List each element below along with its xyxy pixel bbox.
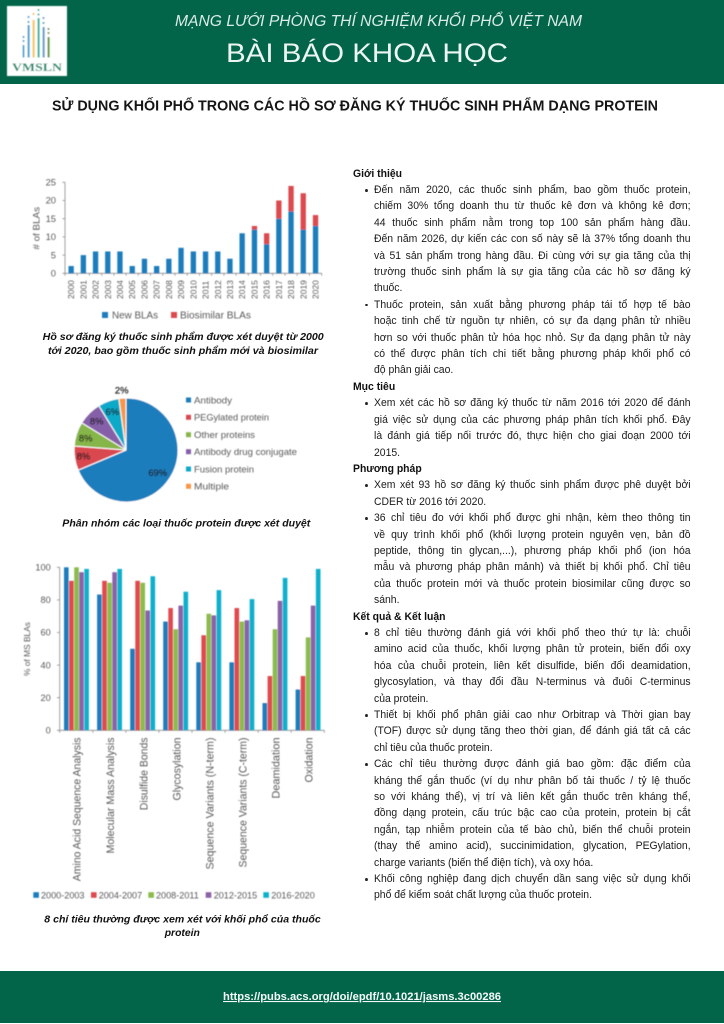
slice: PEGylated protein <box>74 446 126 470</box>
section: Kết quả & Kết luận: (thay thế amino acid), succinimidation, glycation, PEGylation, <box>374 840 691 852</box>
section: Giới thiệu: 44 thuốc sinh phẩm nằm trong top 100 sản phẩm hàng đầu. <box>374 217 691 229</box>
pie chart: protein drug types <box>74 385 297 502</box>
slice: Antibody <box>78 398 178 502</box>
section: Giới thiệu: thuốc. <box>374 282 402 294</box>
caption: chart 1: Hồ sơ đăng ký thuốc sinh phẩm được xét duyệt từ 2000 <box>43 331 324 343</box>
section: Kết quả & Kết luận: Khối công nghiệp đang dịch chuyển dần sang việc sử dụng khối <box>374 873 691 885</box>
section: Kết quả & Kết luận: glycosylation, và thay đổi đầu N-terminus và đuôi C-terminus <box>374 676 691 688</box>
section: Kết quả & Kết luận: đồng dạng protein, cấu trúc bậc cao của protein, protein bị cắt <box>374 807 691 819</box>
y axis title: % of MS BLAs <box>22 622 32 676</box>
y axis title: # of BLAs <box>32 207 42 250</box>
section: Giới thiệu: trường thuốc sinh phẩm là sự gia tăng của các hồ sơ đăng ký <box>374 266 691 278</box>
x axis category labels: Oxidation <box>304 738 316 782</box>
header title: BÀI BÁO KHOA HỌC <box>226 38 508 68</box>
caption: chart 3 <box>44 914 321 939</box>
pie legend: Other proteins <box>194 429 255 440</box>
section: Kết quả & Kết luận: ngắn, tạp nhiễm protein của tế bào chủ, biến thể chuỗi protein <box>374 824 691 836</box>
x axis year labels: 2020 <box>310 280 320 299</box>
section: Kết quả & Kết luận: so với kháng thể), vị trí và liên kết gắn thuốc trên kháng thể, <box>374 791 691 803</box>
section: Kết quả & Kết luận: 8 chỉ tiêu thường đánh giá với khối phổ theo thứ tự là: chuỗi <box>374 627 691 639</box>
legend: 2012-2015 <box>214 890 257 900</box>
bar chart: BLAs per year <box>32 176 322 322</box>
x axis year labels: 2017 <box>274 280 284 299</box>
series: 2008-2011 <box>74 567 310 730</box>
caption: chart 3: 8 chỉ tiêu thường được xem xét với khối phổ của thuốc <box>44 914 321 926</box>
section: Mục tiêu: là đánh giá tiếp nối trước đó, thực hiện cho giai đoạn 2000 tới <box>374 430 691 442</box>
section: Kết quả & Kết luận: của protein. <box>374 693 428 705</box>
x axis category labels: Disulfide Bonds <box>138 737 150 810</box>
caption: chart 2: Phân nhóm các loại thuốc protein được xét duyệt <box>62 518 311 530</box>
section: Giới thiệu: có thể được phân tích chi tiết bằng phương pháp khối phổ có <box>374 348 691 360</box>
slice: Other proteins <box>74 423 126 450</box>
section: Phương pháp: Phương pháp <box>353 463 422 475</box>
x axis category labels: Amino Acid Sequence Analysis <box>72 737 84 881</box>
pie percentage labels: 69% <box>148 467 167 478</box>
slice: Fusion protein <box>99 398 126 450</box>
pie legend: PEGylated protein <box>194 412 269 423</box>
legend <box>102 311 251 322</box>
x axis year labels: 2014 <box>237 280 247 299</box>
logo: VMSLN: VMSLN <box>12 62 63 74</box>
pie percentage labels: 8% <box>77 450 90 461</box>
section: Phương pháp <box>353 463 691 606</box>
section: Mục tiêu: Xem xét các hồ sơ đăng ký thuốc từ năm 2016 tới 2020 để đánh <box>374 397 691 409</box>
section: Giới thiệu: và 51 sản phẩm trong hàng đầu. Đi cùng với sự gia tăng của thị <box>374 250 691 262</box>
y axis labels: 15 <box>46 213 56 224</box>
x axis category labels: Molecular Mass Analysis <box>105 737 117 854</box>
pie legend: Antibody drug conjugate <box>194 446 297 457</box>
legend: 2008-2011 <box>156 890 199 900</box>
header band <box>0 0 724 84</box>
section: Kết quả & Kết luận: Kết quả & Kết luận <box>353 611 445 623</box>
x axis year labels: 2007 <box>152 280 162 299</box>
section: Mục tiêu: giá việc sử dụng của các phương pháp phân tích khối phổ. Đây <box>374 414 691 426</box>
pie legend: Multiple <box>194 481 229 492</box>
y axis labels: 100 <box>35 562 51 572</box>
x axis year labels: 2006 <box>139 280 149 299</box>
article text column <box>353 168 691 901</box>
x axis year labels: 2003 <box>103 280 113 299</box>
legend: 2000-2003 <box>41 890 84 900</box>
legend: 2004-2007 <box>99 890 142 900</box>
pie percentage labels: 6% <box>106 406 119 417</box>
axes <box>62 182 322 276</box>
y axis labels: 80 <box>40 595 51 605</box>
source link: https://pubs.acs.org/doi/epdf/10.1021/jasms.3c00286 <box>223 991 501 1003</box>
x axis year labels: 2013 <box>225 280 235 299</box>
y axis labels: 0 <box>51 268 56 278</box>
section: Phương pháp: sánh. <box>374 594 399 606</box>
pie percentage labels <box>77 385 167 478</box>
bar chart: % of MS BLAs <box>22 562 324 900</box>
section: Phương pháp: CDER từ 2016 tới 2020. <box>374 496 486 508</box>
x axis year labels: 2004 <box>115 280 125 299</box>
series: 2012-2015 <box>79 572 315 730</box>
x axis year labels: 2002 <box>91 280 101 299</box>
pie legend: Fusion protein <box>194 463 254 474</box>
legend: Biosimilar BLAs <box>180 311 251 322</box>
section: Phương pháp: peptide, thông tin glycan,...), phương pháp khối phổ (ion hóa <box>374 545 691 557</box>
y axis labels <box>46 176 56 278</box>
x axis category labels: Deamidation <box>271 738 283 798</box>
section: Kết quả & Kết luận: hóa của chuỗi protein, liên kết disulfide, biến đổi deamidation, <box>374 660 691 672</box>
y axis labels: 40 <box>40 660 51 670</box>
section: Giới thiệu: hoặc tinh chế từ nguồn tự nhiên, có sự đa dạng phân tử nhiều <box>374 315 691 327</box>
y axis labels: 20 <box>40 693 51 703</box>
x axis year labels: 2015 <box>249 280 259 299</box>
section: Giới thiệu: Thuốc protein, sản xuất bằng phương pháp tái tổ hợp tế bào <box>374 299 691 311</box>
y axis labels <box>35 562 51 736</box>
section: Giới thiệu: Giới thiệu <box>353 168 402 180</box>
caption: chart 1: tới 2020, bao gồm thuốc sinh phẩm mới và biosimilar <box>48 345 319 357</box>
y axis labels: 25 <box>46 176 56 188</box>
slice: Antibody drug conjugate <box>82 406 126 450</box>
section: Phương pháp: mẫu và phương pháp phân mảnh) và thiết bị khối phổ. Chỉ tiêu <box>374 561 691 573</box>
x axis year labels <box>66 280 320 299</box>
x axis category labels <box>72 737 316 881</box>
section: Mục tiêu <box>353 381 691 458</box>
section: Giới thiệu: độ phân giải cao. <box>374 364 453 376</box>
series: 2004-2007 <box>69 581 305 730</box>
section: Mục tiêu: 2015. <box>374 446 400 458</box>
main heading: SỬ DỤNG KHỐI PHỔ TRONG CÁC HỒ SƠ ĐĂNG KÝ THUỐC SINH PHẨM DẠNG PROTEIN <box>52 96 658 114</box>
pie percentage labels: 8% <box>79 433 92 444</box>
y axis labels: 0 <box>46 726 51 736</box>
section: Kết quả & Kết luận: amino acid của thuốc, khối lượng phân tử protein, biến đổi oxy <box>374 643 691 655</box>
y axis labels: 5 <box>51 249 56 260</box>
series: Biosimilar BLAs <box>252 186 318 244</box>
x axis year labels: 2009 <box>176 280 186 299</box>
x axis year labels: 2018 <box>286 280 296 299</box>
x axis year labels: 2011 <box>200 280 210 299</box>
section: Kết quả & Kết luận: (TOF) được sử dụng tăng theo thời gian, để đánh giá tất cả các <box>374 725 691 737</box>
section: Giới thiệu: hơn so với thuốc phân tử hóa học nhỏ. Sự đa dạng phân tử này <box>374 332 691 344</box>
x axis year labels: 2000 <box>66 280 76 299</box>
x axis year labels: 2012 <box>213 280 223 299</box>
slice: Multiple <box>119 398 126 450</box>
y axis labels: 10 <box>46 231 56 242</box>
section: Kết quả & Kết luận: chỉ tiêu của thuốc protein. <box>374 742 493 754</box>
legend <box>33 890 315 900</box>
x axis year labels: 2016 <box>262 280 272 299</box>
x axis year labels: 2001 <box>78 280 88 299</box>
series: 2000-2003 <box>64 567 300 730</box>
pie legend <box>186 394 297 492</box>
series: New BLAs <box>68 211 318 273</box>
header subtitle: MẠNG LƯỚI PHÒNG THÍ NGHIỆM KHỐI PHỔ VIỆT NAM <box>175 11 583 30</box>
section: Kết quả & Kết luận: phổ để kiểm soát chất lượng của thuốc protein. <box>374 889 592 901</box>
pie percentage labels: 2% <box>115 385 128 396</box>
section: Phương pháp: Xem xét 93 hồ sơ đăng ký thuốc sinh phẩm được phê duyệt bởi <box>374 479 691 491</box>
section: Phương pháp: về quy trình khối phổ (khối lượng protein nguyên vẹn, bản đồ <box>374 529 691 541</box>
legend: New BLAs <box>112 311 158 322</box>
x axis category labels: Sequence Variants (C-term) <box>238 738 250 868</box>
series: 2016-2020 <box>84 569 320 730</box>
section: Kết quả & Kết luận: Các chỉ tiêu thường được đánh giá bao gồm: đặc điểm của <box>374 758 691 770</box>
x axis year labels: 2010 <box>188 280 198 299</box>
pie legend: Antibody <box>194 394 232 405</box>
section: Giới thiệu: chiếm 30% tổng doanh thu từ thuốc kê đơn và không kê đơn; <box>374 200 691 212</box>
axes <box>57 567 324 733</box>
section: Giới thiệu <box>353 168 691 376</box>
section: Phương pháp: 36 chỉ tiêu đo với khối phổ được ghi nhận, kèm theo thông tin <box>374 512 691 524</box>
pie percentage labels: 8% <box>90 416 103 427</box>
x axis category labels: Glycosylation <box>171 738 183 800</box>
x axis year labels: 2005 <box>127 280 137 299</box>
section: Giới thiệu: Đến năm 2026, dự kiến các con số này sẽ là 37% tổng doanh thu <box>374 233 691 245</box>
y axis labels: 20 <box>46 195 56 206</box>
logo: VMSLN <box>7 6 67 76</box>
caption: chart 1 <box>43 331 324 357</box>
y axis labels: 60 <box>40 628 51 638</box>
x axis year labels: 2019 <box>298 280 308 299</box>
x axis category labels: Sequence Variants (N-term) <box>204 738 216 870</box>
x axis year labels: 2008 <box>164 280 174 299</box>
section: Kết quả & Kết luận: charge variants (biến thể điện tích), và oxy hóa. <box>374 857 593 869</box>
caption: chart 3: protein <box>164 928 200 939</box>
section: Giới thiệu: Đến năm 2020, các thuốc sinh phẩm, bao gồm thuốc protein, <box>374 184 691 196</box>
section: Phương pháp: của thuốc protein mới và thuốc protein biosimilar cũng được so <box>374 578 691 590</box>
legend: 2016-2020 <box>271 890 315 900</box>
section: Kết quả & Kết luận: kháng thể gắn thuốc (ví dụ như phân bố tải thuốc / tỷ lệ thuốc <box>374 775 691 787</box>
footer band <box>0 971 724 1023</box>
section: Kết quả & Kết luận <box>353 611 691 901</box>
section: Kết quả & Kết luận: Thiết bị khối phổ phân giải cao như Orbitrap và Thời gian bay <box>374 709 691 721</box>
section: Mục tiêu: Mục tiêu <box>353 381 395 393</box>
